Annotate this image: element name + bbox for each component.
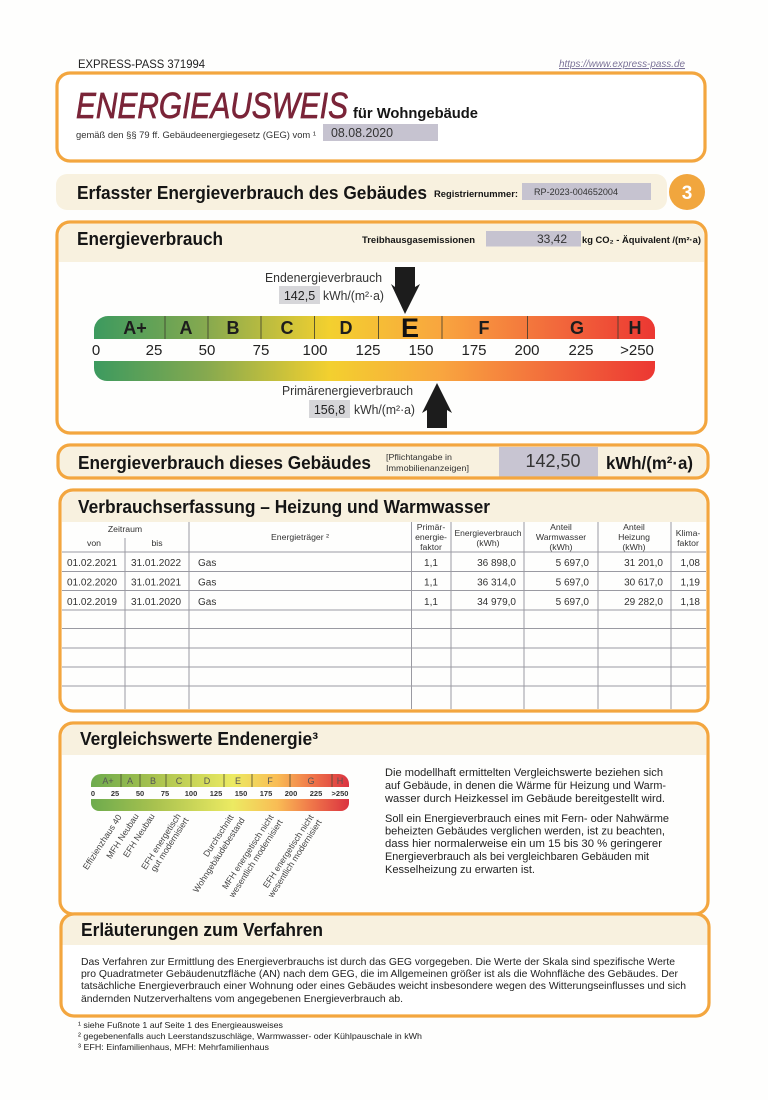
table row 2020: 1,19	[681, 578, 700, 588]
table header: (kWh)	[622, 542, 646, 552]
table row 2021: 31.01.2022	[131, 558, 181, 569]
mandatory note	[386, 452, 469, 473]
primary energy value: kWh/(m²·a)	[354, 403, 415, 417]
website link: https://www.express-pass.de	[559, 58, 685, 70]
table header: Warmwasser	[536, 532, 586, 542]
small rating scale: F	[267, 776, 273, 786]
rotated building type labels: MFH Neubau	[104, 812, 141, 860]
table header: Klima-	[676, 528, 700, 538]
comparison explanation text: Kesselheizung zu erwarten ist.	[385, 864, 535, 876]
small rating scale: >250	[332, 789, 348, 798]
page reference number: EXPRESS-PASS 371994	[78, 57, 205, 71]
emissions value	[486, 231, 581, 246]
scale numbers: >250	[620, 342, 654, 359]
rating bar A+ to H: E	[401, 313, 419, 343]
emissions label: Treibhausgasemissionen	[362, 235, 475, 245]
rotated building type labels: wesentlich modernisiert	[226, 817, 285, 900]
scale numbers: 100	[302, 342, 328, 359]
rotated building type labels: EFH energetisch	[139, 812, 183, 871]
rotated building type labels: wesentlich modernisiert	[265, 817, 324, 900]
table row 2020: 31.01.2021	[131, 578, 181, 588]
comparison explanation text: Die modellhaft ermittelten Vergleichswerte beziehen sich	[385, 767, 663, 779]
small rating scale: 25	[111, 789, 119, 798]
panel: title header	[57, 73, 705, 161]
explanation body text: Das Verfahren zur Ermittlung des Energieverbrauchs ist durch das GEG vorgegeben. Die Werte der Skala sind spezifische Werte	[81, 957, 675, 968]
table row 2019: 1,1	[424, 597, 438, 608]
arrow: primary energy marker	[422, 383, 452, 428]
table header: Energieträger ²	[271, 532, 329, 542]
footnotes: ² gegebenenfalls auch Leerstandszuschläge, Warmwasser- oder Kühlpauschale in kWh	[78, 1031, 422, 1041]
table row 2019: 31.01.2020	[131, 597, 181, 608]
table header: Heizung	[618, 532, 650, 542]
table row 2020: 01.02.2020	[67, 578, 117, 588]
table row 2021	[67, 558, 700, 569]
table row 2019: Gas	[198, 597, 216, 608]
rating bar A+ to H: C	[280, 318, 294, 338]
scale numbers: 225	[568, 342, 594, 359]
final energy value: kWh/(m²·a)	[323, 289, 384, 303]
table header: energie-	[415, 532, 447, 542]
date field	[323, 124, 438, 141]
rating bar A+ to H: A+	[123, 318, 147, 338]
registration number field: RP-2023-004652004	[534, 187, 618, 197]
table row 2020	[67, 578, 700, 588]
emissions unit: kg CO₂ - Äquivalent /(m²·a)	[582, 235, 701, 245]
small rating scale: E	[235, 776, 241, 786]
small rating scale: 50	[136, 789, 144, 798]
table row 2020: 1,1	[424, 578, 438, 588]
small rating scale: H	[337, 776, 343, 786]
mandatory note: Immobilienanzeigen]	[386, 463, 469, 473]
rotated building type labels: EFH energetisch nicht	[261, 812, 316, 890]
scale numbers: 25	[146, 342, 162, 359]
comparison explanation text: beheizten Gebäudes verglichen werden, ist zu beachten,	[385, 826, 665, 838]
registration number field	[522, 183, 651, 200]
arrow: final energy marker	[391, 267, 420, 314]
scale numbers: 200	[514, 342, 540, 359]
comparison explanation text: Soll ein Energieverbrauch eines mit Fern- oder Nahwärme	[385, 813, 669, 825]
panel: comparison values	[60, 723, 708, 914]
consumption unit: kWh/(m²·a)	[606, 453, 693, 473]
rating bar A+ to H: G	[570, 318, 584, 338]
table row 2021: 5 697,0	[556, 558, 589, 569]
final energy label: Endenergieverbrauch	[265, 271, 382, 285]
date field: 08.08.2020	[331, 126, 393, 140]
primary energy gradient bar	[94, 361, 655, 381]
table row 2019: 1,18	[681, 597, 700, 608]
table row 2019: 34 979,0	[477, 597, 516, 608]
panel: explanation of the procedure	[61, 914, 709, 1016]
rotated building type labels	[81, 812, 324, 900]
rotated building type labels: gut modernisiert	[148, 815, 191, 873]
mandatory note: [Pflichtangabe in	[386, 452, 452, 462]
comparison explanation text: auf Gebäude, in denen die Wärme für Heizung und Warm-	[385, 780, 666, 792]
explanation body text	[81, 957, 686, 1005]
table row 2021: 36 898,0	[477, 558, 516, 569]
table header: faktor	[677, 538, 699, 548]
table header: Primär-	[417, 522, 445, 532]
table header: Energieverbrauch	[454, 528, 522, 538]
primary energy label: Primärenergieverbrauch	[282, 384, 413, 398]
small rating scale: B	[150, 776, 156, 786]
table row 2021: Gas	[198, 558, 216, 569]
rotated building type labels: Wohngebäudebestand	[191, 816, 247, 894]
table header: Anteil	[550, 522, 572, 532]
explanation body text: tatsächliche Energieverbrauch einer Wohnung oder eines Gebäudes weicht insbesondere wegen des Witterungseinflusses und sich	[81, 981, 686, 992]
table row 2020: 5 697,0	[556, 578, 589, 588]
small rating scale: 125	[210, 789, 222, 798]
table row 2019: 29 282,0	[624, 597, 663, 608]
small rating scale: D	[204, 776, 211, 786]
rating bar A+ to H: F	[478, 318, 490, 338]
rating bar A+ to H: D	[340, 318, 352, 338]
rotated building type labels: Durchschnitt	[201, 812, 236, 859]
table header: (kWh)	[476, 538, 500, 548]
table row 2020: 36 314,0	[477, 578, 516, 588]
scale numbers: 175	[461, 342, 487, 359]
registration label: Registriernummer:	[434, 189, 518, 199]
scale numbers: 50	[199, 342, 215, 359]
consumption value: 142,50	[525, 451, 581, 471]
legal basis line: gemäß den §§ 79 ff. Gebäudeenergiegesetz (GEG) vom ¹	[76, 130, 316, 140]
panel heading: Energieverbrauch dieses Gebäudes	[78, 453, 371, 473]
footnotes: ¹ siehe Fußnote 1 auf Seite 1 des Energieausweises	[78, 1020, 283, 1030]
table header: Anteil	[623, 522, 645, 532]
explanation body text: pro Quadratmeter Gebäudenutzfläche (AN) nach dem GEG, die im Allgemeinen größer ist als die Wohnfläche des Gebäudes. Der	[81, 969, 679, 980]
small rating scale: C	[176, 776, 183, 786]
explanation body text: ändernden Nutzerverhaltens vom angegebenen Energieverbrauch ab.	[81, 994, 403, 1005]
panel heading: Erläuterungen zum Verfahren	[81, 920, 323, 940]
comparison explanation text	[384, 767, 669, 876]
table header: (kWh)	[549, 542, 573, 552]
final energy value: 142,5	[284, 289, 315, 303]
panel: consumption table	[60, 490, 708, 711]
title: ENERGIEAUSWEIS	[76, 85, 348, 126]
small rating scale: 100	[185, 789, 197, 798]
footnotes	[78, 1020, 422, 1052]
rating bar A+ to H	[94, 313, 655, 343]
table row 2021: 31 201,0	[624, 558, 663, 569]
comparison explanation text: Energieverbrauch als bei vergleichbaren Gebäuden mit	[385, 851, 649, 863]
comparison explanation text: wasser durch Heizkessel im Gebäude bereitgestellt wird.	[384, 793, 665, 805]
small rating scale	[91, 774, 349, 811]
value field	[499, 447, 598, 477]
rotated building type labels: MFH energetisch nicht	[220, 812, 276, 891]
table header: faktor	[420, 542, 442, 552]
table row 2019: 5 697,0	[556, 597, 589, 608]
panel heading: Energieverbrauch	[77, 229, 223, 249]
panel: this building's energy use	[58, 445, 708, 478]
small rating scale: 75	[161, 789, 169, 798]
small rating scale: 225	[310, 789, 322, 798]
icon: page number badge	[669, 174, 705, 210]
table header	[87, 522, 700, 552]
table row 2019: 01.02.2019	[67, 597, 117, 608]
small rating scale: A	[127, 776, 133, 786]
scale numbers	[92, 342, 654, 359]
table row 2019	[67, 597, 700, 608]
panel heading: Vergleichswerte Endenergie³	[80, 729, 318, 749]
panel: energy consumption scale	[57, 222, 706, 433]
table row 2021: 1,1	[424, 558, 438, 569]
primary energy value	[309, 400, 415, 418]
small rating scale: 150	[235, 789, 247, 798]
comparison explanation text: dass hier normalerweise ein um 15 bis 30 % geringerer	[385, 838, 662, 850]
footnotes: ³ EFH: Einfamilienhaus, MFH: Mehrfamilienhaus	[78, 1042, 269, 1052]
small rating scale: 175	[260, 789, 272, 798]
small rating scale: 0	[91, 789, 95, 798]
table header: von	[87, 538, 101, 548]
panel heading: Verbrauchserfassung – Heizung und Warmwasser	[78, 497, 490, 517]
table grid	[62, 522, 706, 709]
table row 2021: 01.02.2021	[67, 558, 117, 569]
scale numbers: 0	[92, 342, 100, 359]
table row 2021: 1,08	[681, 558, 700, 569]
scale numbers: 125	[355, 342, 381, 359]
table row 2020: 30 617,0	[624, 578, 663, 588]
small rating scale: G	[307, 776, 315, 786]
rating bar A+ to H: B	[226, 318, 240, 338]
scale numbers: 75	[253, 342, 269, 359]
table header: bis	[151, 538, 163, 548]
table row 2020: Gas	[198, 578, 216, 588]
rotated building type labels: Effizienzhaus 40	[81, 813, 124, 871]
emissions value: 33,42	[537, 232, 567, 246]
small rating scale: 200	[285, 789, 297, 798]
rating bar A+ to H: H	[628, 318, 642, 338]
rating bar A+ to H: A	[180, 318, 192, 338]
section banner: recorded energy use	[56, 174, 667, 210]
subtitle: für Wohngebäude	[353, 105, 478, 122]
primary energy value: 156,8	[314, 403, 345, 417]
banner heading: Erfasster Energieverbrauch des Gebäudes	[77, 183, 427, 203]
final energy value	[279, 286, 384, 304]
icon: page number badge: 3	[682, 183, 692, 204]
table header: Zeitraum	[108, 524, 142, 534]
scale numbers: 150	[408, 342, 434, 359]
rotated building type labels: EFH Neubau	[121, 812, 157, 859]
small rating scale: A+	[102, 776, 114, 786]
